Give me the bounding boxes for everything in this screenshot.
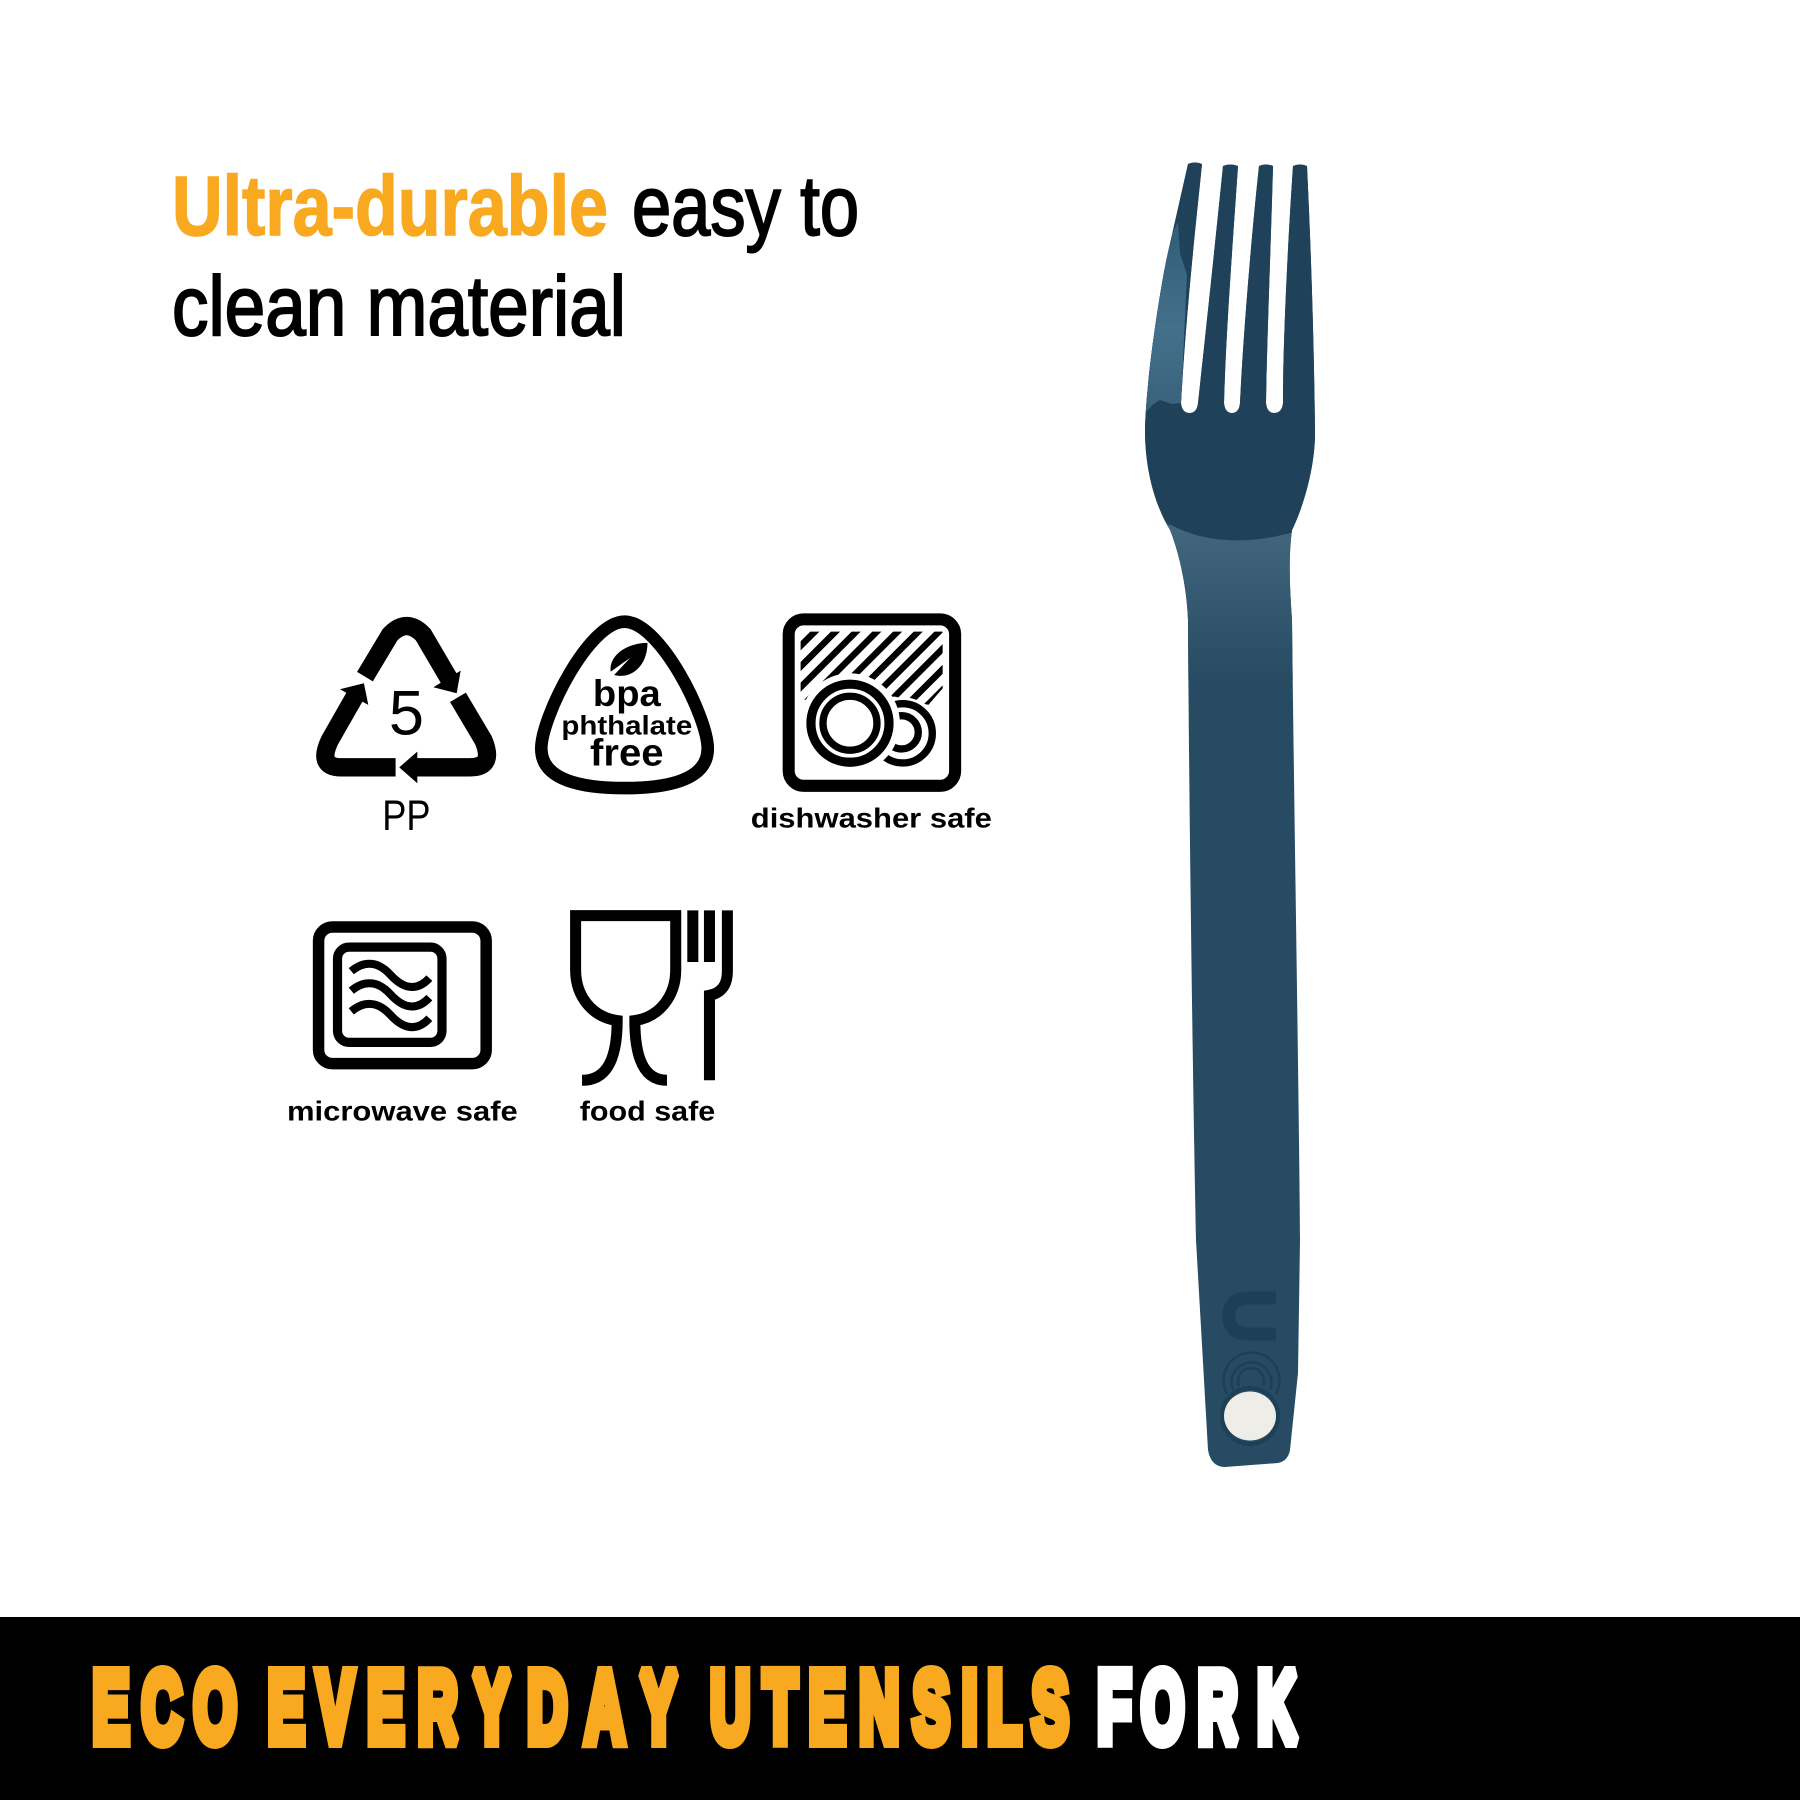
icon: dishwasher safe [752, 613, 991, 828]
heading: Ultra-durable [172, 159, 608, 253]
fork [1145, 162, 1315, 1467]
icon: bpa phthalate free [541, 622, 708, 788]
icon: bpa phthalate free: phthalate [561, 711, 692, 741]
heading: clean material [172, 259, 626, 353]
icon: microwave safe [287, 927, 518, 1126]
heading [172, 159, 859, 353]
fork head shadow [1145, 162, 1315, 540]
banner subtitle: FORK [1098, 1652, 1297, 1764]
banner title: ECO EVERYDAY UTENSILS [93, 1652, 1069, 1764]
icon: recycling 5 PP [325, 626, 487, 839]
icon: recycling 5 PP: 5 [389, 679, 424, 749]
icon: bpa phthalate free: free [590, 733, 664, 775]
heading: easy to [632, 159, 859, 253]
fork neck highlight [1167, 525, 1294, 680]
fork tine highlight [1146, 222, 1187, 412]
icon: recycling 5 PP: PP [382, 792, 431, 839]
fork body [1145, 162, 1315, 1467]
banner [0, 1617, 1800, 1800]
icon: food safe [576, 910, 727, 1126]
icon: food safe: food safe [580, 1095, 715, 1126]
icons group [287, 619, 1013, 1126]
fork hole [1224, 1392, 1276, 1440]
icon: dishwasher safe: dishwasher safe [751, 803, 992, 834]
icon: bpa phthalate free: bpa [593, 673, 661, 714]
icon: microwave safe: microwave safe [287, 1095, 518, 1126]
logo emboss [1222, 1298, 1280, 1444]
